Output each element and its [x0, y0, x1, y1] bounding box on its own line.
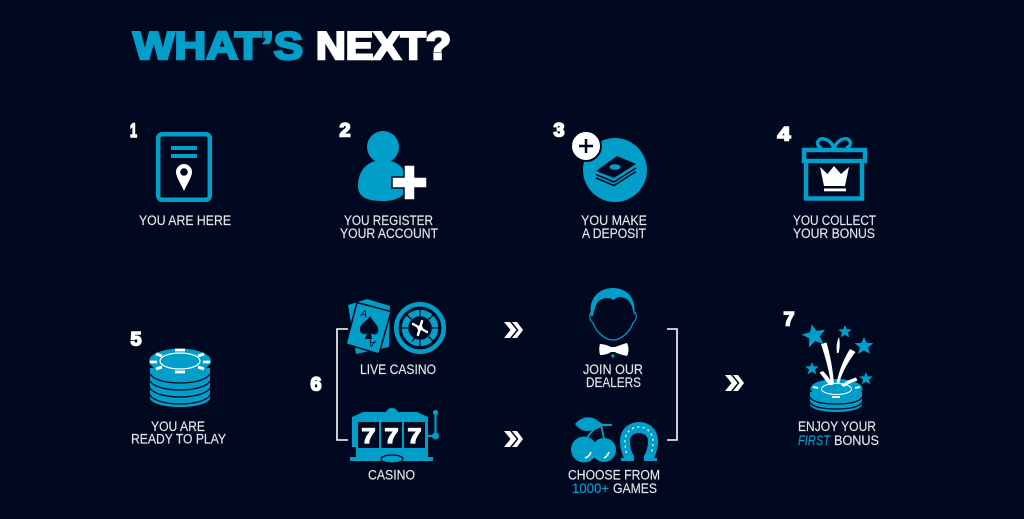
title: NEXT? — [316, 25, 451, 68]
right bracket — [667, 329, 677, 440]
label: YOU ARE HERE — [139, 213, 231, 228]
step 3 — [554, 120, 647, 241]
label — [581, 213, 647, 241]
step number 1: 1 — [130, 121, 137, 142]
label: YOUR ACCOUNT — [340, 226, 438, 241]
icon: cherries — [571, 417, 616, 462]
label: A DEPOSIT — [582, 226, 646, 241]
icon: chip stack — [149, 348, 211, 407]
label — [340, 213, 438, 241]
label: BONUS — [834, 433, 879, 448]
label: YOUR BONUS — [793, 226, 875, 241]
step number 2: 2 — [340, 120, 350, 142]
arrow: chevrons to step 7 — [725, 375, 744, 391]
label: 1000+ — [572, 481, 609, 496]
icon: playing cards: A — [367, 336, 377, 349]
label: JOIN OUR — [583, 362, 643, 377]
label — [793, 213, 876, 241]
arrow: chevrons top — [504, 322, 523, 338]
step 2 — [340, 120, 438, 241]
icon: document with location pin — [158, 134, 210, 200]
label: LIVE CASINO — [360, 362, 436, 377]
title: WHAT’S — [133, 25, 303, 68]
label — [131, 419, 226, 446]
icon: chips with stars and sparks — [800, 322, 873, 412]
step 4 — [778, 124, 876, 241]
step number 4: 4 — [778, 124, 791, 146]
icon: deposit banknotes — [571, 131, 647, 202]
arrow: chevrons bottom — [504, 431, 523, 447]
icon: slot machine — [350, 408, 439, 463]
icon: slot machine: 7 — [408, 425, 422, 448]
label: ENJOY YOUR — [798, 419, 876, 434]
step number 6: 6 — [310, 374, 322, 396]
icon: gift box with crown — [804, 139, 865, 198]
label: YOU COLLECT — [793, 213, 876, 228]
label: YOU ARE — [151, 419, 205, 434]
icon: playing cards — [346, 299, 391, 354]
icon: slot machine: 7 — [362, 425, 376, 448]
icon: dealer face with bow tie — [590, 288, 636, 358]
label: READY TO PLAY — [131, 432, 226, 446]
label: CHOOSE FROM — [568, 468, 660, 482]
label — [583, 362, 643, 390]
icon: user with plus — [358, 131, 427, 201]
step 5 — [130, 330, 226, 446]
label — [798, 419, 879, 448]
label: GAMES — [613, 481, 657, 496]
label: FIRST — [798, 433, 831, 448]
label: DEALERS — [586, 375, 641, 390]
label — [568, 468, 660, 496]
step 7 — [784, 310, 879, 448]
label: YOU MAKE — [581, 213, 647, 228]
step 1 — [130, 121, 231, 228]
title — [133, 25, 451, 68]
label: CASINO — [368, 468, 415, 482]
icon: playing cards: A — [359, 308, 369, 321]
left bracket — [337, 329, 348, 440]
icon: slot machine: 7 — [384, 425, 398, 448]
step 6 — [310, 288, 677, 496]
icon: horseshoe — [620, 422, 658, 461]
label: YOU REGISTER — [344, 213, 433, 228]
step number 3: 3 — [554, 120, 564, 142]
step number 5: 5 — [130, 330, 142, 350]
icon: roulette wheel — [396, 304, 444, 352]
step number 7: 7 — [784, 310, 794, 330]
